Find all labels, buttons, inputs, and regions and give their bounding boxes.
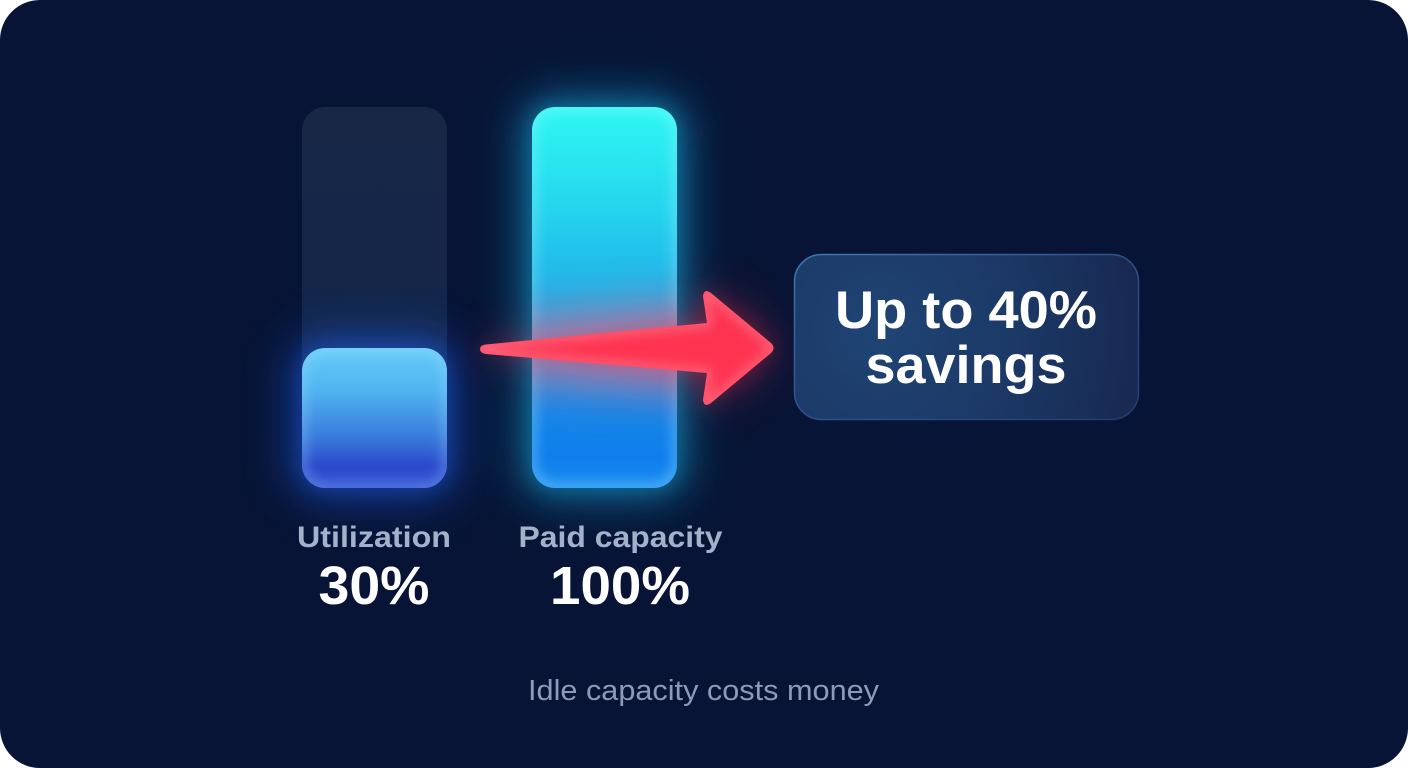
label name: Paid capacity	[518, 521, 723, 554]
bar fill 30%	[302, 348, 447, 488]
bar: paid capacity	[500, 97, 720, 498]
bar fill 100%	[532, 107, 677, 488]
bar glow	[292, 338, 457, 498]
arrow body	[480, 291, 774, 405]
label: paid capacity	[518, 521, 723, 616]
arrow: utilization gap to savings	[480, 291, 774, 405]
label name: Utilization	[297, 521, 451, 554]
callout: savings	[794, 254, 1138, 420]
arrow glow	[480, 291, 774, 405]
arrow edge highlight	[480, 291, 774, 405]
label value: 100%	[550, 556, 690, 616]
arrow haze on bar	[500, 302, 720, 394]
caption: Idle capacity costs money	[528, 675, 880, 707]
bar glow	[522, 97, 687, 498]
callout text line 1: Up to 40%	[835, 281, 1097, 340]
label: utilization	[297, 521, 451, 616]
bar: utilization	[292, 107, 457, 498]
label value: 30%	[318, 556, 430, 616]
bar track	[302, 107, 447, 488]
callout text line 2: savings	[866, 336, 1066, 395]
callout box	[794, 254, 1138, 420]
